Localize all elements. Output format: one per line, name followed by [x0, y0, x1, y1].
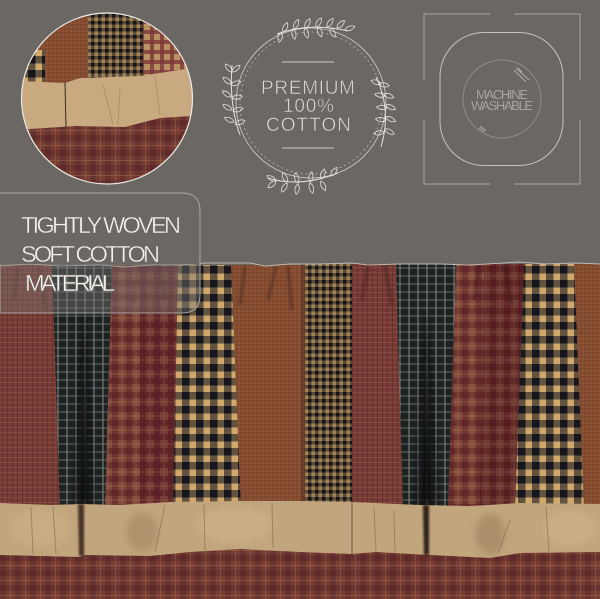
wreath ring [236, 28, 386, 178]
wreath text: 100% [283, 96, 334, 117]
badge: premium cotton wreath [221, 17, 396, 195]
rounded square [440, 32, 563, 166]
washable text: MACHINE [476, 87, 528, 102]
callout text: TIGHTLY WOVEN [21, 212, 181, 238]
curtain top edge [0, 262, 600, 267]
wreath text: PREMIUM [261, 78, 355, 99]
highlights [479, 68, 529, 132]
washable text [471, 87, 533, 113]
wreath branch: bottom [266, 166, 339, 195]
right panel strips [352, 264, 600, 510]
washable text: WASHABLE [471, 98, 533, 113]
fabric detail circle [20, 10, 193, 190]
wreath text: COTTON [266, 115, 351, 136]
lower plaid fabric [0, 545, 600, 599]
badge: machine washable [424, 14, 580, 184]
left panel strips [0, 264, 352, 510]
wreath divider lines [282, 62, 334, 148]
wreath branch: top [277, 17, 356, 43]
callout text: MATERIAL [25, 270, 115, 296]
callout text: SOFT COTTON [21, 241, 160, 267]
wreath text [261, 78, 355, 136]
ruffle [0, 501, 600, 558]
inner circle [463, 60, 541, 138]
wreath branch: right [370, 77, 396, 147]
frame corners [424, 14, 580, 184]
gather shadows at curtain top [14, 266, 512, 310]
photo: curtain [0, 262, 600, 599]
callout text [21, 212, 181, 296]
ruffle in detail [20, 68, 192, 129]
panel: text callout [0, 193, 200, 313]
wreath branch: left [221, 63, 246, 135]
